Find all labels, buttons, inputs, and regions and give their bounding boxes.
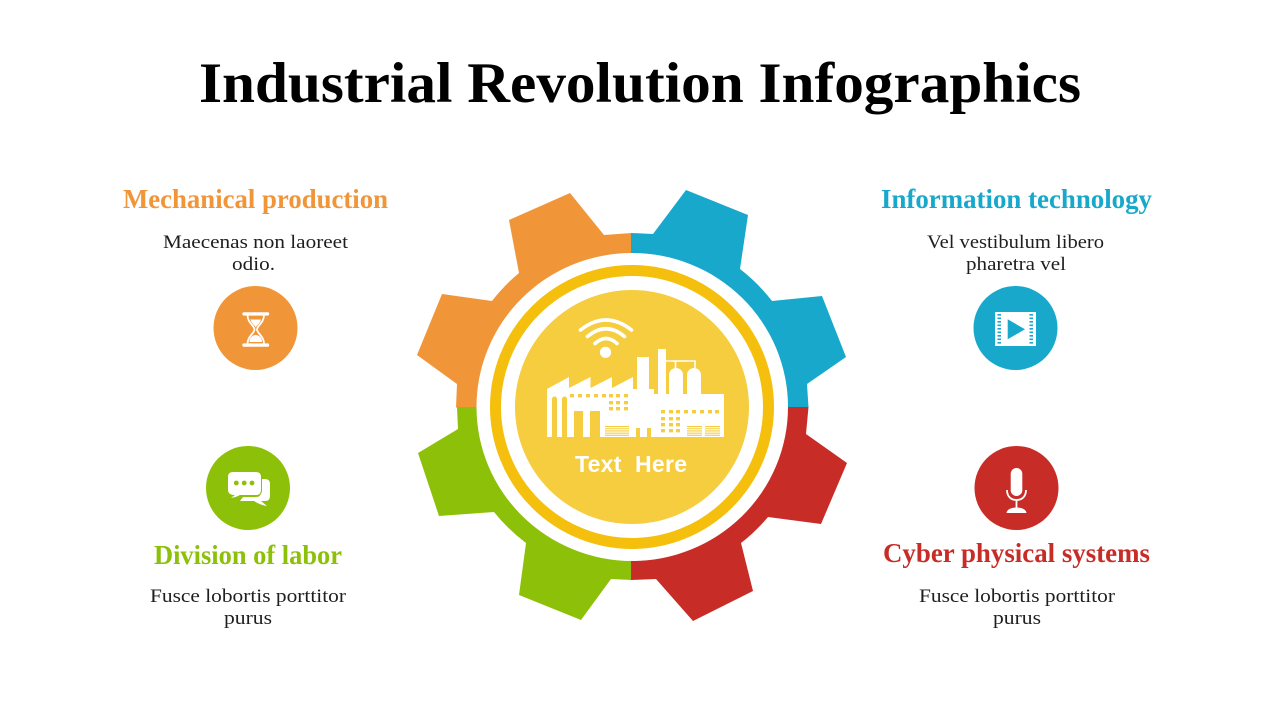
body text: Fusce lobortis porttitor [919,586,1116,607]
inner yellow disc [515,290,749,524]
gear segment: green [418,407,632,620]
central gear diagram [417,190,847,621]
body text: purus [224,608,272,629]
body text [919,586,1116,629]
body text: purus [993,608,1041,629]
icon: chat bubbles [206,446,290,530]
heading: Division of labor [154,540,342,570]
icon: factory [547,349,724,437]
gear segment: red [631,407,847,621]
heading: Mechanical production [123,184,388,214]
body text: Maecenas non laoreet [163,232,349,253]
icon: microphone [974,446,1058,530]
body text: pharetra vel [966,254,1066,275]
heading: Cyber physical systems [883,538,1150,568]
gear segment: orange [417,193,632,408]
body text: odio. [232,254,275,275]
panel: mechanical production [123,184,388,370]
body text [163,232,349,275]
title: Industrial Revolution Infographics [199,52,1081,115]
icon: hourglass [214,286,298,370]
panel: division of labor [150,446,347,629]
heading: Information technology [881,184,1152,214]
body text: Vel vestibulum libero [927,232,1104,253]
body text [927,232,1104,275]
icon: wifi signal [580,320,632,358]
body text: Fusce lobortis porttitor [150,586,347,607]
icon: film play [974,286,1058,370]
panel: information technology [881,184,1152,370]
yellow ring [496,270,768,544]
panel: cyber physical systems [883,446,1150,629]
gear segment: blue [631,190,846,408]
center label: Text Here [575,451,687,477]
body text [150,586,347,629]
